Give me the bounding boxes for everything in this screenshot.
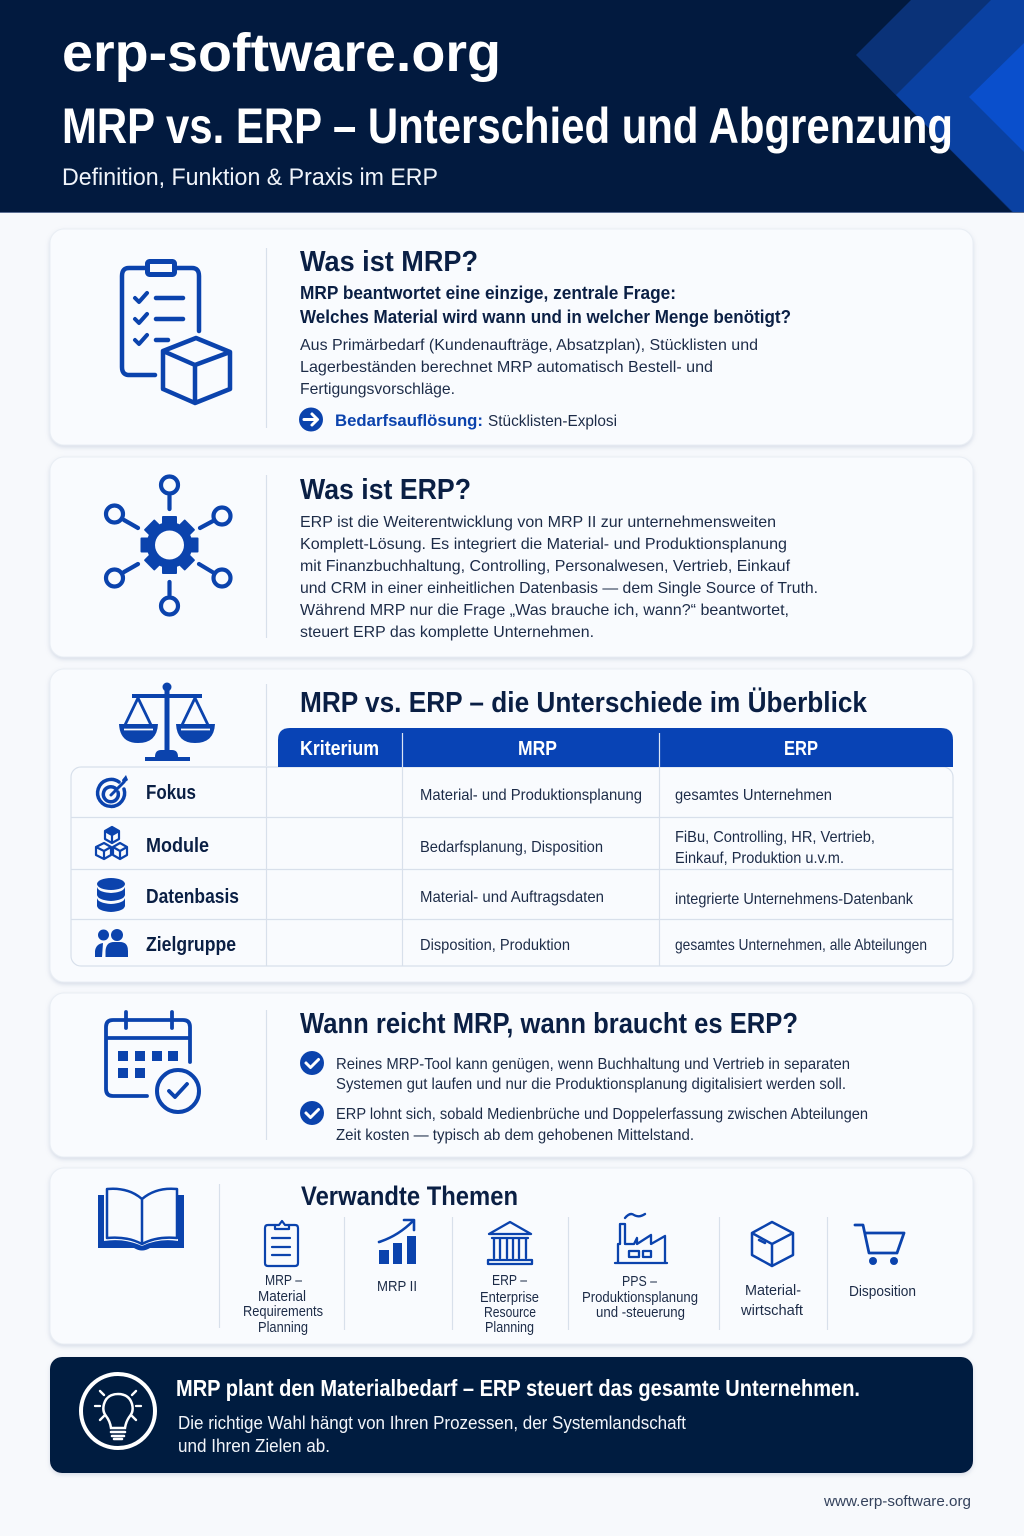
- body text: steuert ERP das komplette Unternehmen.: [300, 624, 594, 641]
- topic: Disposition: [849, 1225, 916, 1300]
- site name: erp-software.org: [62, 23, 501, 83]
- topic: MRP: Requirements: [243, 1304, 323, 1320]
- point 1: [300, 1051, 850, 1093]
- key term: Stücklisten-Explosi: [488, 413, 617, 430]
- panel: Was ist ERP: [50, 457, 973, 657]
- panel: Wann reicht MRP: [50, 993, 973, 1157]
- row: Zielgruppe: Zielgruppe: [146, 934, 236, 956]
- table header: ERP: [784, 738, 818, 760]
- lead question: Welches Material wird wann und in welcher Menge benötigt?: [300, 307, 791, 327]
- topic: MRP II: MRP II: [377, 1279, 417, 1295]
- closing banner: [50, 1357, 973, 1473]
- body text: Während MRP nur die Frage „Was brauche ich, wann?“ beantwortet,: [300, 602, 789, 619]
- row: Module: FiBu, Controlling, HR, Vertrieb,: [675, 829, 875, 846]
- body text: [300, 337, 758, 398]
- row: Fokus: [98, 775, 832, 806]
- banner text: Die richtige Wahl hängt von Ihren Prozessen, der Systemlandschaft: [178, 1413, 686, 1433]
- panel: comparison: [50, 669, 973, 982]
- topic: PPS: Produktionsplanung: [582, 1290, 698, 1306]
- icon: light bulb: [81, 1374, 155, 1448]
- heading: MRP vs. ERP – die Unterschiede im Überblick: [300, 686, 868, 719]
- topic: PPS: PPS –: [622, 1274, 658, 1290]
- body text: ERP ist die Weiterentwicklung von MRP II zur unternehmensweiten: [300, 514, 776, 531]
- subtitle: Definition, Funktion & Praxis im ERP: [62, 164, 438, 191]
- body text: Komplett-Lösung. Es integriert die Material- und Produktionsplanung: [300, 536, 787, 553]
- topic: MRP: MRP –: [265, 1273, 303, 1289]
- topic: PPS: [582, 1214, 698, 1321]
- heading: Wann reicht MRP, wann braucht es ERP?: [300, 1008, 798, 1040]
- point 2: Zeit kosten — typisch ab dem gehobenen Mittelstand.: [336, 1127, 694, 1144]
- table header: Kriterium: [300, 738, 379, 760]
- point 1: Systemen gut laufen und nur die Produktionsplanung digitalisiert werden soll.: [336, 1076, 846, 1093]
- topic: MRP: [243, 1221, 323, 1336]
- topic: MRP II: [377, 1220, 417, 1295]
- topic: Disposition: Disposition: [849, 1284, 916, 1300]
- icon: open book: [98, 1189, 184, 1250]
- lead question: MRP beantwortet eine einzige, zentrale Frage:: [300, 283, 676, 303]
- row: Zielgruppe: gesamtes Unternehmen, alle Abteilungen: [675, 937, 927, 954]
- topic: ERP: Enterprise: [480, 1290, 539, 1306]
- icon: arrow circle: [299, 408, 323, 432]
- topic: MRP: Planning: [258, 1320, 308, 1336]
- row: Zielgruppe: Disposition, Produktion: [420, 937, 570, 954]
- topic: PPS: und -steuerung: [596, 1305, 685, 1321]
- heading: Was ist MRP?: [300, 246, 478, 278]
- body text: Fertigungsvorschläge.: [300, 381, 455, 398]
- table header: MRP: [518, 738, 557, 760]
- topic: Materialwirtschaft: [740, 1222, 803, 1319]
- row: Datenbasis: [97, 878, 914, 912]
- topic: Materialwirtschaft: wirtschaft: [740, 1303, 803, 1319]
- table: [71, 728, 953, 966]
- header banner: [0, 0, 1024, 213]
- banner text: [178, 1413, 686, 1456]
- row: Fokus: gesamtes Unternehmen: [675, 787, 832, 804]
- topic: MRP: Material: [258, 1289, 306, 1305]
- topic: ERP: [480, 1222, 539, 1336]
- banner text: und Ihren Zielen ab.: [178, 1436, 330, 1456]
- row: Datenbasis: Datenbasis: [146, 886, 239, 908]
- key term: [335, 411, 617, 430]
- body text: [300, 514, 818, 641]
- body text: und CRM in einer einheitlichen Datenbasis — dem Single Source of Truth.: [300, 580, 818, 597]
- heading: Verwandte Themen: [301, 1181, 518, 1211]
- body text: mit Finanzbuchhaltung, Controlling, Personalwesen, Vertrieb, Einkauf: [300, 558, 791, 575]
- row: Module: [96, 827, 875, 867]
- icon: gear network: [106, 476, 230, 614]
- row: Datenbasis: Material- und Auftragsdaten: [420, 889, 604, 906]
- point 2: ERP lohnt sich, sobald Medienbrüche und Doppelerfassung zwischen Abteilungen: [336, 1106, 868, 1123]
- row: Fokus: Fokus: [146, 782, 196, 804]
- row: Module: Module: [146, 835, 209, 857]
- lead question: [300, 283, 791, 327]
- body text: Aus Primärbedarf (Kundenaufträge, Absatzplan), Stücklisten und: [300, 337, 758, 354]
- row: Module: Bedarfsplanung, Disposition: [420, 839, 603, 856]
- icon: calendar: [106, 1012, 199, 1112]
- panel: Was ist MRP: [50, 229, 973, 445]
- panel: Verwandte Themen: [50, 1168, 973, 1344]
- icon: clipboard and box: [122, 262, 230, 403]
- body text: Lagerbeständen berechnet MRP automatisch Bestell- und: [300, 359, 713, 376]
- key term: Bedarfsauflösung:: [335, 411, 483, 430]
- topic: ERP: Resource: [484, 1305, 536, 1321]
- banner headline: MRP plant den Materialbedarf – ERP steuert das gesamte Unternehmen.: [176, 1375, 860, 1401]
- row: Zielgruppe: [95, 929, 927, 957]
- heading: Was ist ERP?: [300, 474, 471, 506]
- icon: scales: [119, 682, 215, 761]
- topic: ERP: Planning: [485, 1320, 534, 1336]
- table header: [278, 728, 953, 767]
- row: Datenbasis: integrierte Unternehmens-Datenbank: [675, 891, 914, 908]
- topic: ERP: ERP –: [492, 1273, 528, 1289]
- topic: Materialwirtschaft: Material-: [745, 1283, 801, 1299]
- footer url: www.erp-software.org: [823, 1494, 971, 1510]
- point 2: [300, 1101, 868, 1144]
- row: Module: Einkauf, Produktion u.v.m.: [675, 850, 844, 867]
- point 1: Reines MRP-Tool kann genügen, wenn Buchhaltung und Vertrieb in separaten: [336, 1056, 850, 1073]
- row: Fokus: Material- und Produktionsplanung: [420, 787, 642, 804]
